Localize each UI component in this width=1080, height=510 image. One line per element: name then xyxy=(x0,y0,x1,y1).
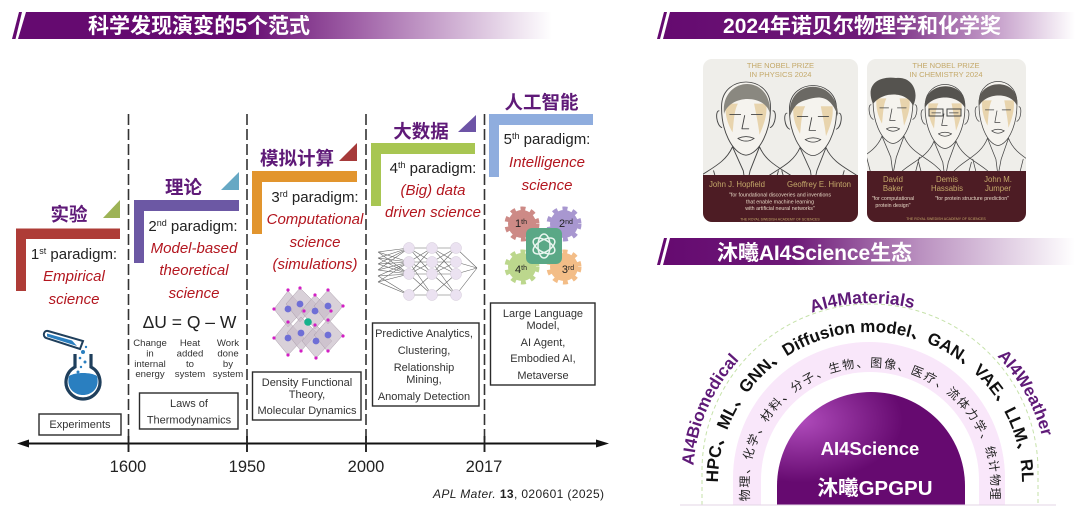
paradigm 1: experiment: 实验 xyxy=(50,204,88,225)
arc text: AI4Weather: AI4Weather xyxy=(998,352,1051,435)
equation: first law of thermodynamics xyxy=(133,312,243,380)
box: Large Language Model: Embodied AI, xyxy=(510,353,576,365)
icon: neural network xyxy=(378,242,477,300)
paradigm 3: simulation: rd xyxy=(280,189,288,199)
diagram: AI4Science ecosystem dome: AI4Science xyxy=(821,438,919,459)
icon: gears with chat logo: 2 xyxy=(559,218,565,230)
equation: first law of thermodynamics: to xyxy=(186,359,194,370)
card: Nobel Prize in Chemistry 2024: IN CHEMISTRY 2024 xyxy=(909,70,983,79)
paradigm 4: big data xyxy=(371,115,481,221)
box: Large Language Model: Large Language xyxy=(503,308,583,320)
paradigm 3: simulation: (simulations) xyxy=(272,256,358,273)
diagram: AI4Science ecosystem dome: 沐曦GPGPU xyxy=(817,477,933,500)
box: Laws of Thermodynamics xyxy=(140,393,238,429)
paradigm 4: big data: paradigm: xyxy=(405,160,476,177)
timeline axis: 2000 xyxy=(348,458,384,476)
paradigm 2: theory: theoretical xyxy=(159,262,229,279)
box: Experiments xyxy=(39,414,121,435)
card: Nobel Prize in Chemistry 2024 xyxy=(867,59,1026,222)
box: Laws of Thermodynamics: Laws of xyxy=(170,398,209,410)
paradigm 5: AI: 人工智能 xyxy=(504,92,579,113)
equation: first law of thermodynamics: system xyxy=(213,369,243,380)
equation: first law of thermodynamics: in xyxy=(146,348,154,360)
arc text: AI4Materials: AI4Materials xyxy=(812,291,914,313)
card: Nobel Prize in Chemistry 2024: John M. xyxy=(984,175,1012,184)
paradigm 3: simulation: Computational xyxy=(267,211,364,228)
banner: 沐曦AI4Science生态 xyxy=(657,238,1075,265)
banner: 2024年诺贝尔物理学和化学奖 xyxy=(657,12,1075,39)
card: Nobel Prize in Chemistry 2024: protein design" xyxy=(875,203,911,209)
icon: flask and test tube xyxy=(44,331,100,399)
icon: gears with chat logo: th xyxy=(521,265,527,272)
equation: first law of thermodynamics: Heat xyxy=(180,338,200,349)
paradigm 2: theory: paradigm: xyxy=(167,218,238,235)
card: Nobel Prize in Chemistry 2024: THE NOBEL PRIZE xyxy=(912,61,980,70)
paradigm 4: big data: (Big) data xyxy=(400,182,466,199)
paradigm 4: big data: driven science xyxy=(385,204,481,221)
box: Predictive Analytics xyxy=(372,323,479,406)
card: Nobel Prize in Physics 2024: "for foundational discoveries and inventions xyxy=(729,192,831,198)
box: Predictive Analytics: Mining, xyxy=(406,374,442,386)
paradigm 2: theory: Model-based xyxy=(151,240,238,257)
timeline axis xyxy=(17,114,609,476)
card: Nobel Prize in Chemistry 2024: Jumper xyxy=(985,184,1011,193)
box: Large Language Model xyxy=(490,303,595,385)
paradigm 5: AI: paradigm: xyxy=(519,131,590,148)
paradigm 3: simulation: 模拟计算 xyxy=(260,148,334,169)
citation: APL Mater. 13, 020601 (2025) xyxy=(432,487,604,501)
paradigm 1: experiment: Empirical xyxy=(43,268,106,285)
paradigm 5: AI: th xyxy=(512,131,519,141)
card: Nobel Prize in Physics 2024: Geoffrey E. Hinton xyxy=(787,180,851,189)
paradigm 2: theory: 理论 xyxy=(165,177,202,198)
banner: 沐曦AI4Science生态: 沐曦AI4Science生态 xyxy=(717,241,912,265)
box: Predictive Analytics: Predictive Analytics, xyxy=(375,328,473,340)
paradigm 5: AI: 5 xyxy=(504,131,512,148)
card: Nobel Prize in Chemistry 2024: Hassabis xyxy=(931,184,963,193)
box: Density Functional Theory: Theory, xyxy=(289,389,325,401)
icon: gears with chat logo: th xyxy=(521,219,527,226)
box: Density Functional Theory xyxy=(252,372,361,420)
equation: first law of thermodynamics: Work xyxy=(217,338,239,349)
card: Nobel Prize in Chemistry 2024: THE ROYAL SWEDISH ACADEMY OF SCIENCES xyxy=(906,217,986,221)
box: Laws of Thermodynamics: Thermodynamics xyxy=(147,414,232,426)
card: Nobel Prize in Physics 2024: with artificial neural networks" xyxy=(745,206,815,212)
paradigm 4: big data: 4 xyxy=(390,160,398,177)
icon: gears with chat logo: 1 xyxy=(515,218,521,230)
arc text: disciplines: 物理、化学、材料、分子、生物、图像、医疗、流体力学、统计物理 xyxy=(738,357,1001,501)
paradigm 2: theory: nd xyxy=(157,218,167,228)
card: Nobel Prize in Chemistry 2024: Baker xyxy=(883,184,904,193)
paradigm 5: AI: science xyxy=(522,177,572,194)
diagram: AI4Science ecosystem dome xyxy=(680,291,1056,506)
equation: first law of thermodynamics: energy xyxy=(135,369,165,380)
paradigm 1: experiment: st xyxy=(39,246,47,256)
icon: gears with chat logo: rd xyxy=(568,265,574,272)
box: Large Language Model: AI Agent, xyxy=(521,337,565,349)
card: Nobel Prize in Physics 2024: IN PHYSICS 2024 xyxy=(749,70,812,79)
card: Nobel Prize in Physics 2024: THE NOBEL PRIZE xyxy=(747,61,814,70)
arc text: AI4Biomedical: AI4Biomedical xyxy=(682,352,738,466)
equation: first law of thermodynamics: system xyxy=(175,369,205,380)
equation: first law of thermodynamics: ΔU = Q – W xyxy=(143,312,237,332)
card: Nobel Prize in Physics 2024: THE ROYAL SWEDISH ACADEMY OF SCIENCES xyxy=(740,218,820,222)
box: Density Functional Theory: Density Functional xyxy=(262,377,352,389)
timeline axis: 2017 xyxy=(466,458,502,476)
box: Large Language Model: Metaverse xyxy=(517,370,569,382)
paradigm 3: simulation: science xyxy=(290,234,340,251)
box: Experiments: Experiments xyxy=(49,419,111,431)
paradigm 2: theory: science xyxy=(169,285,219,302)
banner: 科学发现演变的5个范式 xyxy=(12,12,552,39)
paradigm 3: simulation: paradigm: xyxy=(288,189,359,206)
paradigm 5: AI xyxy=(489,92,593,194)
paradigm 2: theory xyxy=(134,172,239,302)
timeline axis: 1600 xyxy=(110,458,146,476)
box: Predictive Analytics: Clustering, xyxy=(398,345,450,357)
card: Nobel Prize in Chemistry 2024: "for protein structure prediction" xyxy=(935,196,1009,202)
box: Predictive Analytics: Relationship xyxy=(394,362,454,374)
arc text: techniques: HPC、ML、GNN、Diffusion model、GAN、VAE、LLM、RL xyxy=(706,322,1034,482)
card: Nobel Prize in Physics 2024 xyxy=(703,59,858,222)
box: Density Functional Theory: Molecular Dynamics xyxy=(257,405,357,417)
paradigm 1: experiment: 1 xyxy=(31,246,39,263)
timeline axis: 1950 xyxy=(229,458,265,476)
icon: gears with chat logo xyxy=(506,208,580,282)
icon: gears with chat logo: 3 xyxy=(562,264,568,276)
equation: first law of thermodynamics: internal xyxy=(134,359,166,370)
equation: first law of thermodynamics: Change xyxy=(133,338,167,349)
paradigm 1: experiment: science xyxy=(49,291,99,308)
card: Nobel Prize in Chemistry 2024: Demis xyxy=(936,175,958,184)
paradigm 4: big data: 大数据 xyxy=(393,121,449,142)
card: Nobel Prize in Chemistry 2024: "for computational xyxy=(872,196,914,202)
paradigm 4: big data: th xyxy=(398,160,405,170)
box: Predictive Analytics: Anomaly Detection xyxy=(378,391,470,403)
banner: 科学发现演变的5个范式: 科学发现演变的5个范式 xyxy=(88,14,310,38)
equation: first law of thermodynamics: by xyxy=(223,359,233,370)
equation: first law of thermodynamics: added xyxy=(177,348,203,360)
equation: first law of thermodynamics: done xyxy=(217,348,239,360)
paradigm 1: experiment: paradigm: xyxy=(46,246,117,263)
icon: perovskite crystal structure xyxy=(272,286,345,360)
paradigm 3: simulation xyxy=(252,143,364,273)
paradigm 3: simulation: 3 xyxy=(271,189,280,206)
icon: gears with chat logo: nd xyxy=(565,219,573,226)
icon: gears with chat logo: 4 xyxy=(515,264,521,276)
card: Nobel Prize in Physics 2024: that enable machine learning xyxy=(746,200,814,206)
banner: 2024年诺贝尔物理学和化学奖: 2024年诺贝尔物理学和化学奖 xyxy=(723,14,1001,38)
paradigm 2: theory: 2 xyxy=(148,218,157,235)
paradigm 5: AI: Intelligence xyxy=(509,154,585,171)
card: Nobel Prize in Physics 2024: John J. Hopfield xyxy=(709,180,765,189)
card: Nobel Prize in Chemistry 2024: David xyxy=(883,175,903,184)
paradigm 1: experiment xyxy=(16,200,120,308)
box: Large Language Model: Model, xyxy=(526,320,560,332)
